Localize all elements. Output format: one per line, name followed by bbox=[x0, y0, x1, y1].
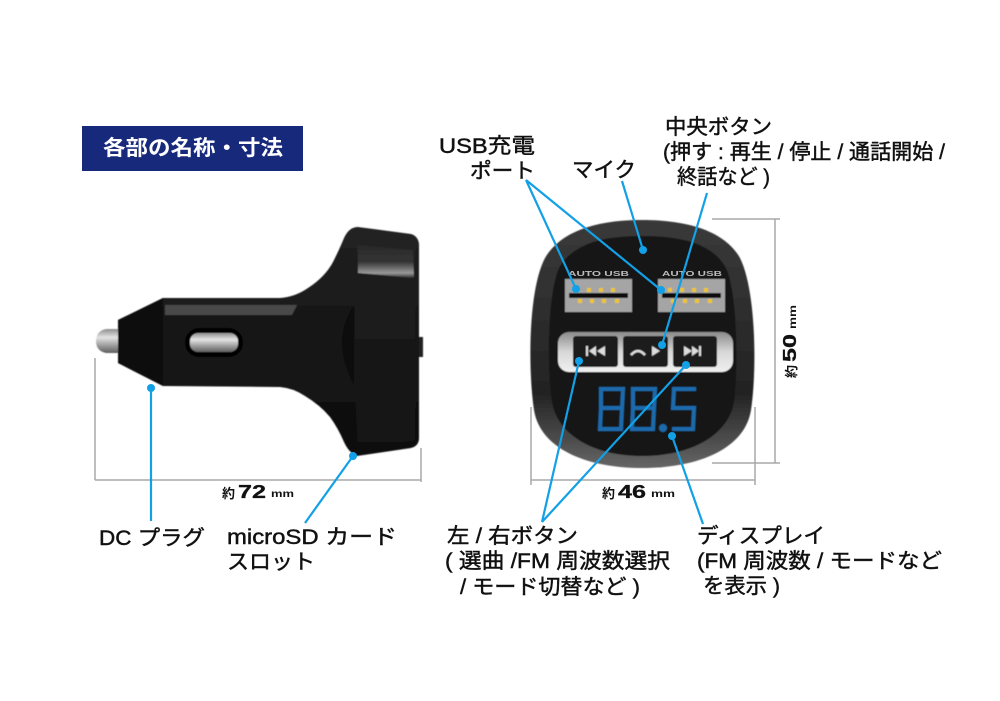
dimension: width 72 mm: 72 bbox=[238, 482, 266, 502]
label: display: を表示 ) bbox=[703, 575, 780, 598]
label: centre button: (押す : 再生 / 停止 / 通話開始 / bbox=[663, 141, 945, 164]
label: microphone: マイク bbox=[572, 159, 636, 182]
label: left and right buttons: ( 選曲 /FM 周波数選択 bbox=[445, 550, 670, 573]
title banner: 各部の名称・寸法 bbox=[103, 136, 283, 160]
dimension: height 50 mm: 50 bbox=[780, 334, 800, 362]
title banner bbox=[82, 126, 303, 171]
body highlight bbox=[165, 305, 297, 315]
metal side contact bbox=[185, 328, 243, 357]
label: centre button: 中央ボタン bbox=[665, 116, 772, 139]
label: display: (FM 周波数 / モードなど bbox=[697, 550, 942, 573]
label: left and right buttons: 左 / 右ボタン bbox=[447, 525, 578, 548]
dimension: width 46 mm bbox=[531, 407, 755, 502]
cone shading bbox=[118, 298, 163, 386]
USB port label left: AUTO USB bbox=[568, 271, 629, 278]
dimension: width 72 mm bbox=[95, 358, 421, 502]
neck shadow bbox=[342, 305, 354, 385]
leader line: microphone bbox=[622, 181, 647, 254]
button right bbox=[673, 336, 717, 367]
USB port label right: AUTO USB bbox=[662, 271, 722, 278]
label: microSD slot: microSD カード bbox=[227, 526, 397, 549]
label: microSD slot: スロット bbox=[227, 551, 315, 574]
label: USB port: USB充電 bbox=[439, 135, 535, 158]
leader line: DC plug bbox=[147, 384, 155, 521]
dimension: height 50 mm bbox=[712, 219, 800, 463]
label: DC plug: DC プラグ bbox=[99, 527, 205, 550]
leader lines: USB ports bbox=[526, 180, 665, 294]
leader lines: left and right buttons bbox=[542, 357, 690, 522]
button left bbox=[573, 336, 618, 367]
dimension: width 46 mm: mm bbox=[651, 489, 675, 500]
label: left and right buttons: / モード切替など ) bbox=[460, 576, 640, 599]
label: display bbox=[697, 525, 942, 598]
label: USB port: ポート bbox=[470, 160, 535, 183]
dimension: height 50 mm: 約 bbox=[784, 365, 799, 378]
dimension: width 46 mm: 約 bbox=[602, 486, 615, 501]
leader line: centre button bbox=[658, 193, 707, 349]
dimension: width 46 mm: 46 bbox=[618, 482, 646, 502]
outer casing bbox=[530, 220, 754, 468]
leader line: display bbox=[668, 432, 703, 524]
LED display reading bbox=[600, 389, 696, 430]
label: centre button bbox=[663, 116, 945, 189]
head front face bbox=[355, 232, 415, 452]
label: USB port bbox=[439, 135, 535, 183]
head highlight bbox=[358, 245, 414, 278]
icon: metal pin tip bbox=[96, 329, 120, 353]
label: display: ディスプレイ bbox=[697, 525, 825, 548]
leader line: microSD slot bbox=[305, 452, 357, 523]
label: microSD slot bbox=[227, 526, 397, 574]
front view of device bbox=[530, 220, 754, 468]
button nub bbox=[419, 337, 423, 357]
side view of device bbox=[96, 227, 423, 456]
label: centre button: 終話など ) bbox=[677, 166, 770, 189]
button bar bbox=[558, 332, 733, 372]
label: left and right buttons bbox=[445, 525, 670, 599]
dimension: height 50 mm: mm bbox=[788, 305, 799, 329]
button centre bbox=[623, 336, 668, 367]
USB port right bbox=[658, 279, 725, 312]
inner face bbox=[549, 236, 736, 456]
dimension: width 72 mm: mm bbox=[271, 489, 294, 500]
USB port left bbox=[565, 279, 632, 312]
plug body silhouette bbox=[118, 227, 419, 456]
dimension: width 72 mm: 約 bbox=[222, 486, 235, 501]
